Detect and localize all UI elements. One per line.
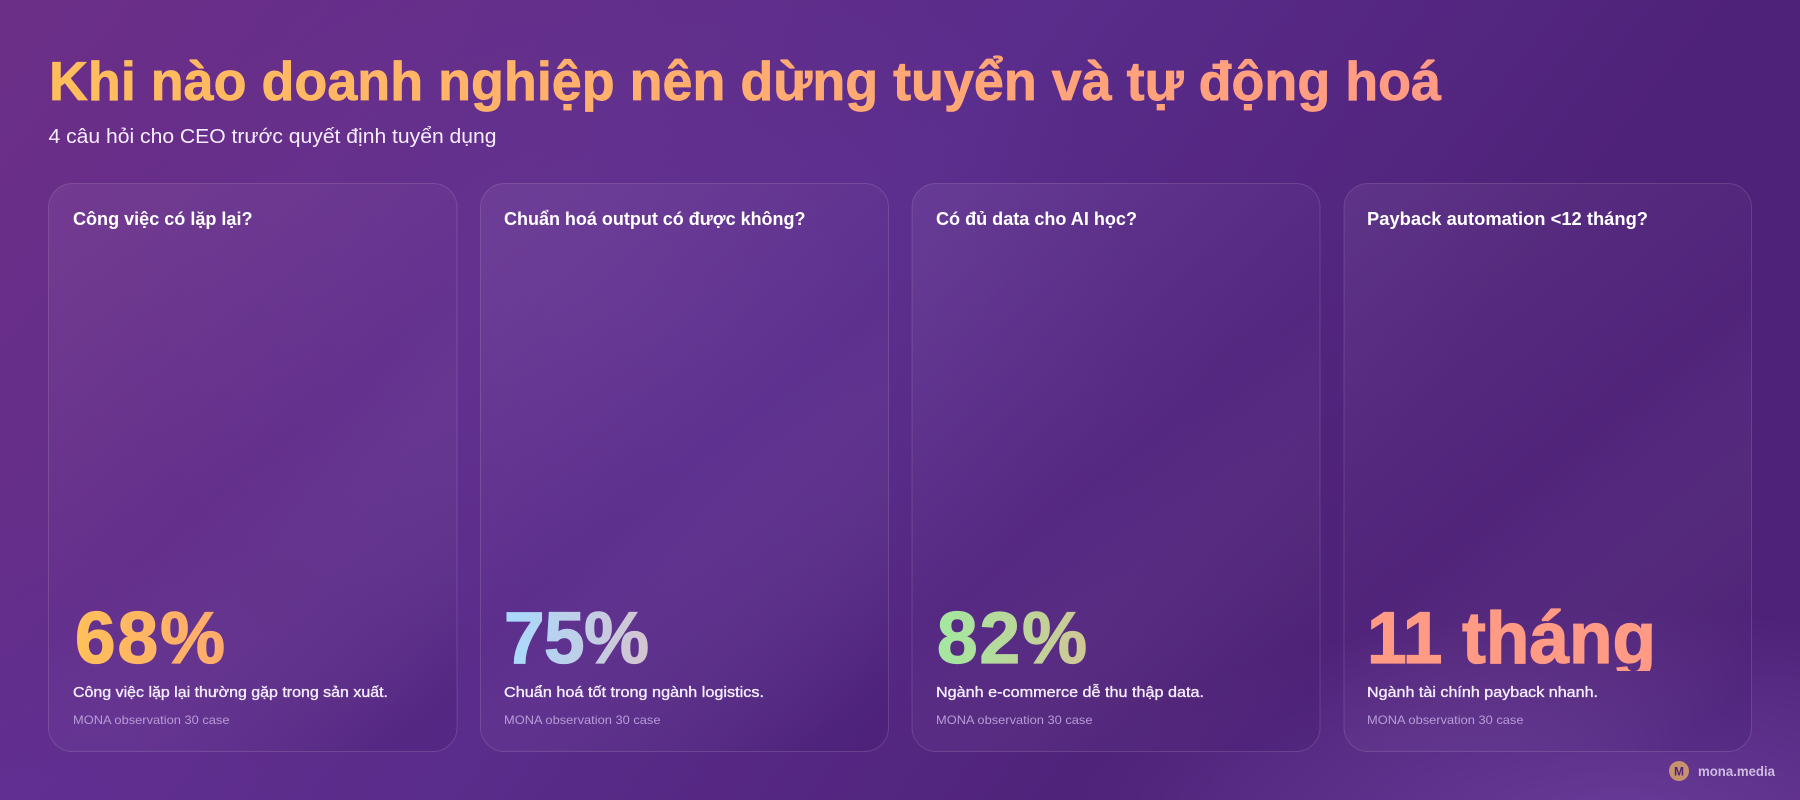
stat description: Công việc lặp lại thường gặp trong sản xuất. bbox=[73, 684, 388, 701]
card heading: Có đủ data cho AI học? bbox=[936, 209, 1137, 229]
stat description: Chuẩn hoá tốt trong ngành logistics. bbox=[504, 684, 764, 701]
brand logo bbox=[1669, 761, 1775, 781]
card heading: Chuẩn hoá output có được không? bbox=[504, 209, 806, 229]
brand logo: M bbox=[1674, 764, 1684, 778]
card heading: Công việc có lặp lại? bbox=[73, 209, 253, 229]
stat value: 68% bbox=[75, 598, 225, 679]
brand logo: mona.media bbox=[1698, 763, 1775, 779]
panel: payback bbox=[1344, 184, 1752, 752]
subtitle: 4 câu hỏi cho CEO trước quyết định tuyển dụng bbox=[48, 126, 496, 148]
stat value: 11 tháng bbox=[1367, 598, 1656, 679]
source note: MONA observation 30 case bbox=[504, 713, 661, 727]
card heading: Payback automation <12 tháng? bbox=[1367, 209, 1648, 229]
source note: MONA observation 30 case bbox=[936, 713, 1093, 727]
stat description: Ngành tài chính payback nhanh. bbox=[1367, 684, 1598, 701]
stat description: Ngành e-commerce dễ thu thập data. bbox=[936, 684, 1204, 701]
source note: MONA observation 30 case bbox=[1367, 713, 1524, 727]
panel: standardised output bbox=[480, 184, 888, 752]
panel: data for AI bbox=[912, 184, 1320, 752]
stat value: 82% bbox=[937, 598, 1087, 679]
title: Khi nào doanh nghiệp nên dừng tuyển và tự động hoá bbox=[49, 50, 1441, 112]
stat value: 75% bbox=[504, 598, 649, 679]
source note: MONA observation 30 case bbox=[73, 713, 230, 727]
panel: repeatable work bbox=[48, 184, 457, 752]
